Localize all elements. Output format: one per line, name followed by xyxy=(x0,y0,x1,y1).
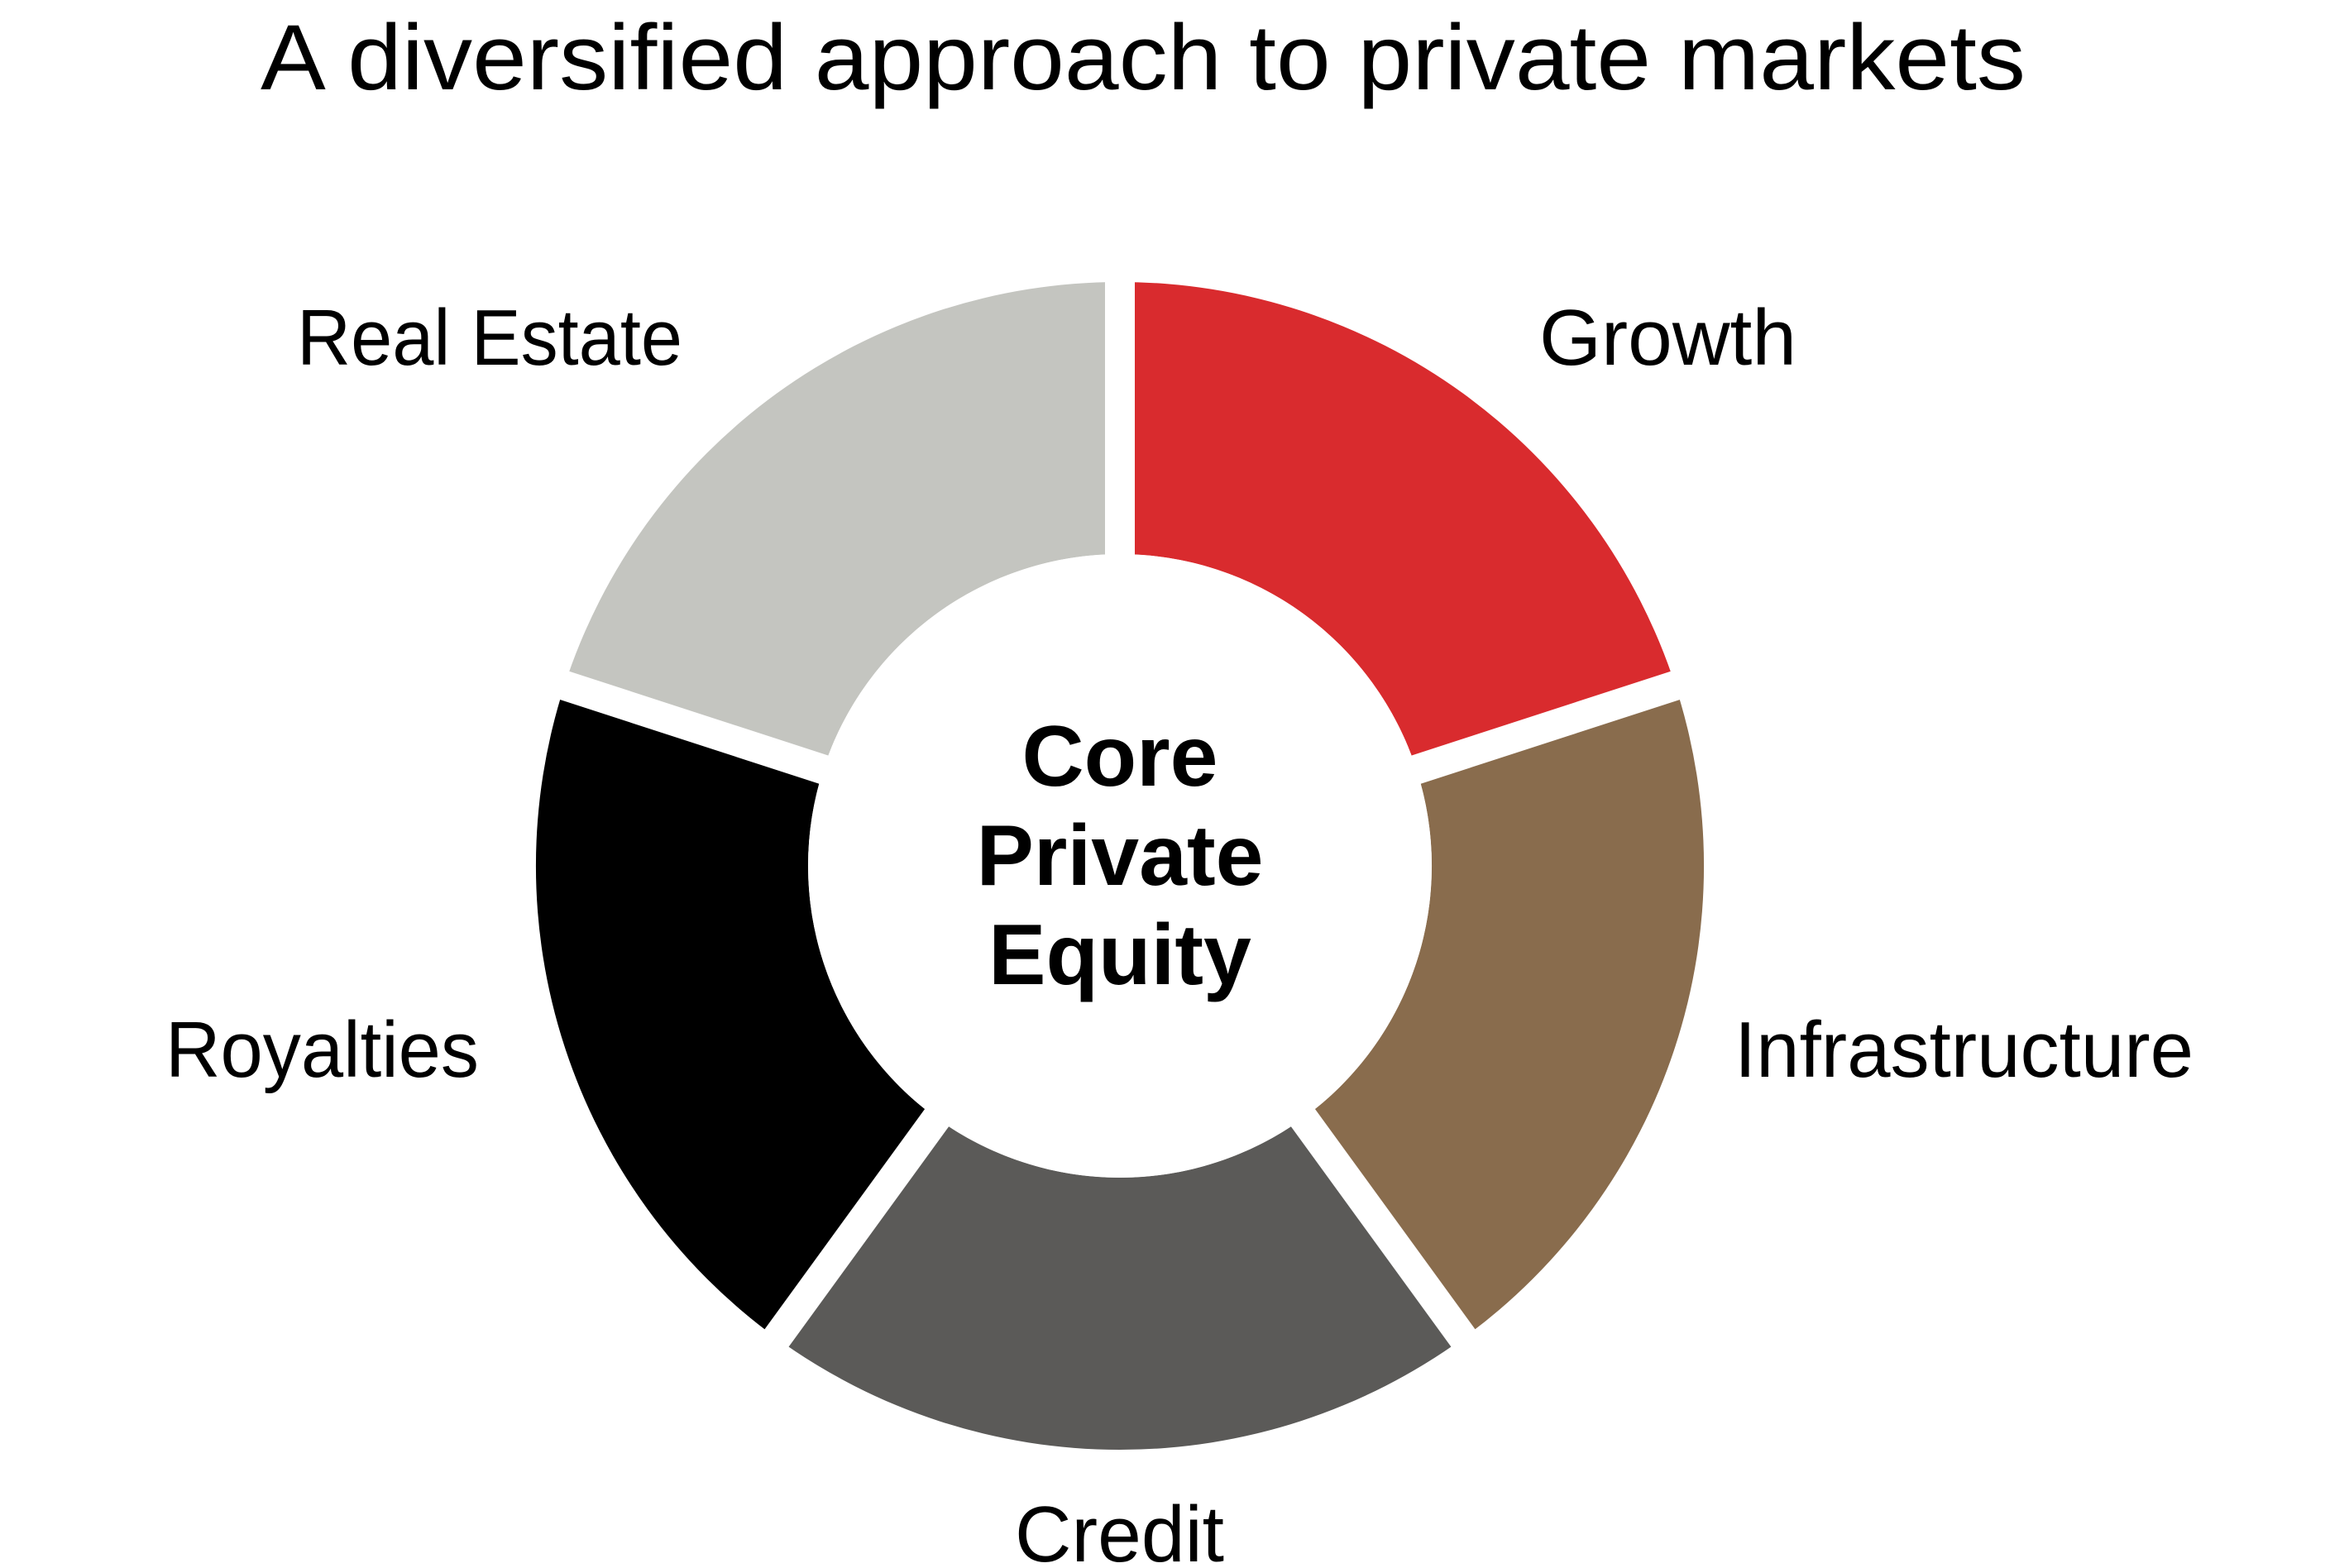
label: Infrastructure: Infrastructure xyxy=(1734,1006,2194,1094)
segment: Royalties xyxy=(536,686,936,1338)
segment: Real Estate xyxy=(564,282,1120,769)
center label: Private xyxy=(977,808,1263,904)
center label xyxy=(977,709,1263,1003)
title: A diversified approach to private markets xyxy=(261,6,2026,109)
segment: Infrastructure xyxy=(1304,686,1704,1338)
segment: Credit xyxy=(777,1118,1463,1450)
label: Growth: Growth xyxy=(1539,294,1796,382)
label: Royalties: Royalties xyxy=(165,1006,479,1094)
label: Real Estate: Real Estate xyxy=(297,294,682,382)
donut chart xyxy=(532,248,1708,1450)
center label: Core xyxy=(1022,709,1218,805)
center label: Equity xyxy=(988,907,1251,1003)
segment: Growth xyxy=(1120,282,1676,769)
